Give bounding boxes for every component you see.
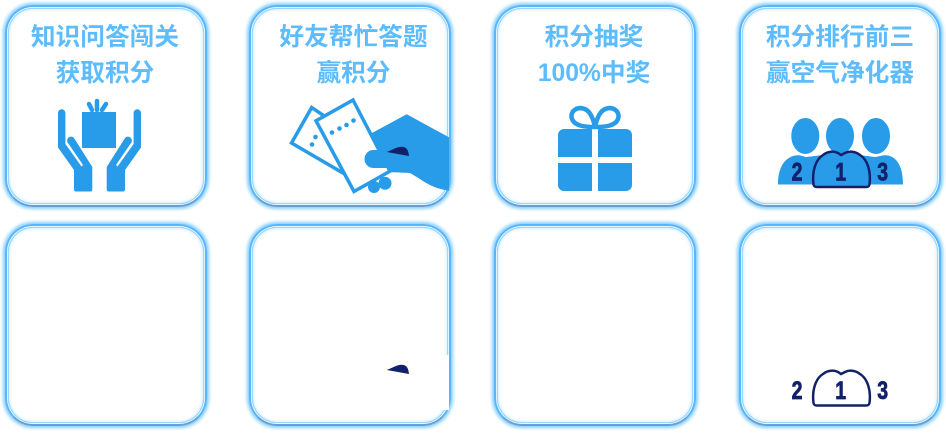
panel: ranking overlay card (734, 220, 946, 430)
panel: ranking card (734, 0, 946, 212)
icon: three ranked people: 2 (792, 158, 802, 186)
heading: friend help (279, 24, 428, 87)
heading: ranking: 赢空气净化器 (766, 60, 914, 87)
icon: ranking outline: 2 (792, 377, 802, 405)
heading: friend help: 好友帮忙答题 (279, 24, 428, 51)
panel: quiz card (0, 0, 212, 212)
heading: quiz (31, 24, 179, 87)
icon: three ranked people: 3 (877, 158, 888, 186)
icon: navy fingernail (386, 364, 409, 374)
icon: ranking outline: 3 (877, 377, 888, 405)
icon: hands holding gift (58, 98, 141, 192)
heading: lottery: 积分抽奖 (545, 24, 643, 51)
icon: ranking outline: 1 (835, 377, 846, 405)
icon: gift box (558, 106, 632, 191)
panel: empty card 1 (0, 220, 212, 430)
panel: empty card 3 (490, 220, 700, 430)
panel: empty card 2 (244, 220, 456, 430)
panel: friend help card (244, 0, 456, 212)
heading: friend help: 赢积分 (316, 60, 391, 87)
mask: white hand silhouette (438, 355, 449, 410)
heading: ranking: 积分排行前三 (766, 24, 914, 51)
icon: ranking outline (792, 369, 888, 407)
heading: lottery (538, 24, 650, 87)
icon: hand holding tickets (289, 98, 449, 194)
icon: three ranked people (778, 118, 903, 188)
heading: quiz: 知识问答闯关 (31, 24, 179, 51)
icon: three ranked people: 1 (835, 158, 846, 186)
panel: lottery card (490, 0, 700, 212)
heading: lottery: 100%中奖 (538, 60, 650, 87)
heading: quiz: 获取积分 (56, 60, 154, 87)
heading: ranking (766, 24, 914, 87)
